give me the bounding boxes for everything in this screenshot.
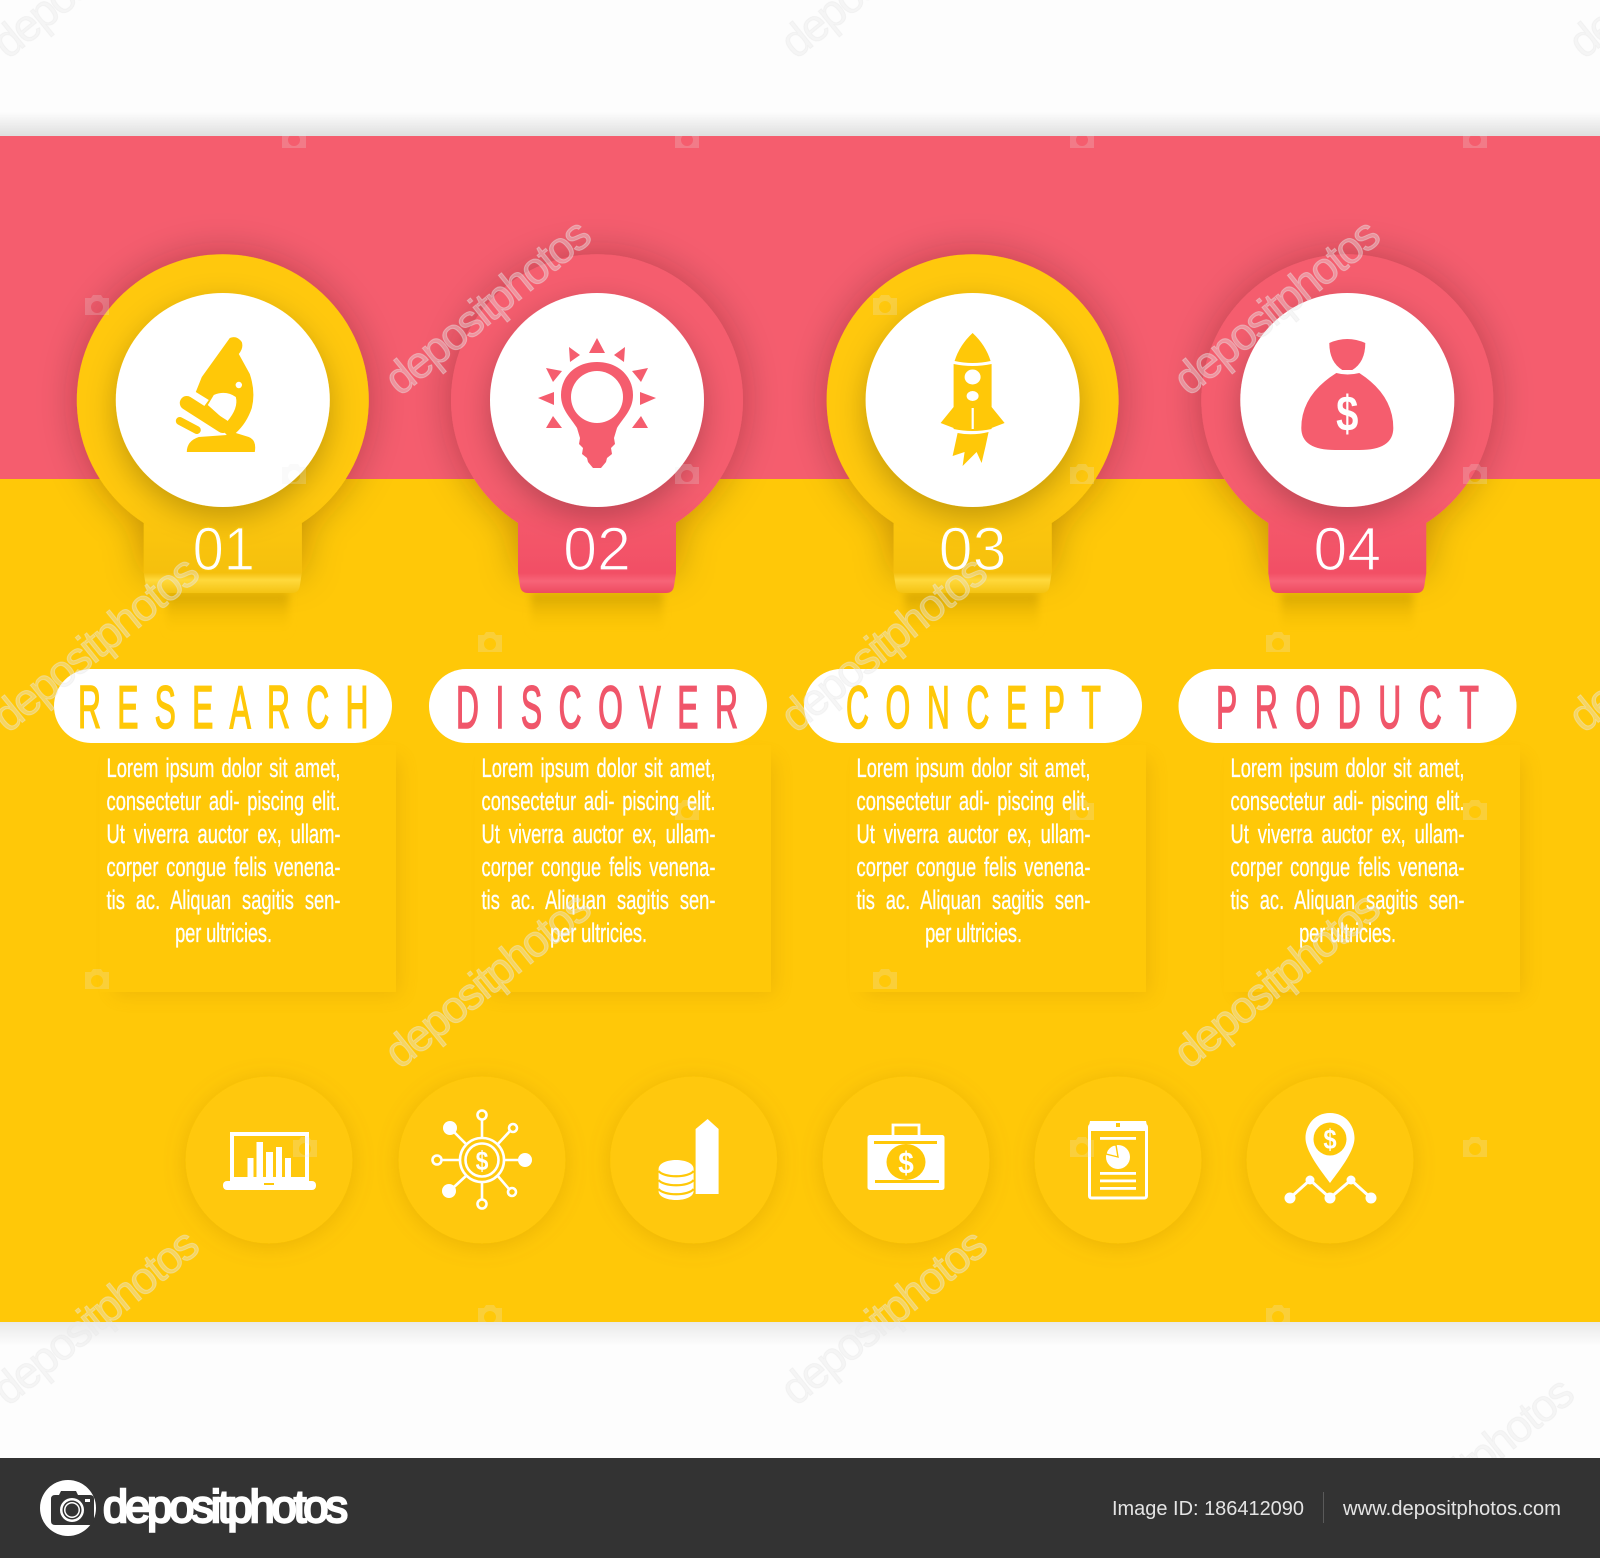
pin 03: concept [827, 254, 1119, 635]
image id: Image ID: 186412090 [1112, 1498, 1304, 1520]
text block: concept: corper congue felis venena- [856, 852, 1090, 882]
icon circle: money case [822, 1076, 990, 1244]
pin 04: product [1201, 254, 1493, 635]
icon circle: report document [1034, 1076, 1202, 1244]
icon: money bag [1301, 339, 1393, 450]
watermark: depositphotos [374, 881, 601, 1078]
text block: discover: Ut viverra auctor ex, ullam- [481, 819, 715, 849]
watermark: depositphotos [770, 545, 997, 742]
heading pill: product: PRODUCT [1216, 676, 1479, 742]
text block: product: tis ac. Aliquan sagitis sen- [1231, 885, 1464, 915]
pin 01: research [77, 254, 369, 635]
text block: concept: consectetur adi- piscing elit. [856, 786, 1090, 816]
watermark: depositphotos [1357, 1366, 1584, 1558]
text block: research: tis ac. Aliquan sagitis sen- [106, 885, 340, 915]
icon: light bulb [538, 338, 656, 468]
heading pill: discover: DISCOVER [456, 676, 738, 742]
text block: discover: tis ac. Aliquan sagitis sen- [481, 885, 715, 915]
text block: research: corper congue felis venena- [106, 852, 340, 882]
number 01: 01 [193, 516, 255, 584]
text block: concept [856, 753, 1090, 948]
pin 02: discover [451, 254, 743, 635]
text block: concept: Ut viverra auctor ex, ullam- [856, 819, 1090, 849]
icon: camera logo [40, 1480, 96, 1536]
icon circle: location pin chart: $ [1323, 1123, 1337, 1155]
watermark: depositphotos [1163, 208, 1390, 405]
heading pill: concept [804, 669, 1142, 743]
text block: product: consectetur adi- piscing elit. [1231, 786, 1464, 816]
number 02: 02 [563, 515, 631, 583]
text block: research: per ultricies. [175, 918, 271, 948]
text block: discover: per ultricies. [550, 918, 646, 948]
text block: concept: Lorem ipsum dolor sit amet, [856, 753, 1090, 783]
text block: discover: corper congue felis venena- [481, 852, 715, 882]
icon circle: laptop chart [186, 1076, 352, 1244]
text block: research [106, 753, 340, 948]
text block: product [1230, 753, 1464, 948]
text block: product: Ut viverra auctor ex, ullam- [1231, 819, 1464, 849]
watermark: depositphotos [1163, 881, 1390, 1078]
watermark: depositphotos [374, 208, 601, 405]
text block: research: Ut viverra auctor ex, ullam- [106, 819, 340, 849]
text block: discover [481, 753, 715, 948]
text card shadow: concept [850, 745, 1146, 992]
icon circle: dollar network: $ [476, 1146, 488, 1176]
text block: product: Lorem ipsum dolor sit amet, [1231, 753, 1464, 783]
text block: discover: consectetur adi- piscing elit. [481, 786, 715, 816]
icon: rocket [941, 333, 1005, 466]
text block: research: Lorem ipsum dolor sit amet, [106, 753, 340, 783]
number 03: 03 [939, 515, 1007, 583]
text block: concept: tis ac. Aliquan sagitis sen- [856, 885, 1090, 915]
heading pill: research: RESEARCH [78, 676, 368, 742]
watermark: depositphotos [770, 1218, 997, 1415]
text block: concept: per ultricies. [925, 918, 1021, 948]
text card shadow: research [100, 745, 396, 992]
text card shadow: product [1224, 745, 1520, 992]
heading pill: product [1178, 669, 1516, 743]
footer bar [0, 1458, 1600, 1558]
logo wordmark: depositphotos [103, 1481, 348, 1532]
icon circle: money case: $ [898, 1146, 914, 1180]
number 04: 04 [1313, 515, 1381, 583]
text card shadow: discover [475, 745, 771, 992]
website: www.depositphotos.com [1342, 1498, 1561, 1520]
icon: money bag: $ [1336, 386, 1358, 442]
icon circle: location pin chart [1246, 1076, 1414, 1244]
icon circle: dollar network [398, 1076, 566, 1244]
text block: research: consectetur adi- piscing elit. [106, 786, 340, 816]
text block: product: corper congue felis venena- [1231, 852, 1464, 882]
heading pill: concept: CONCEPT [846, 676, 1101, 742]
text block: discover: Lorem ipsum dolor sit amet, [481, 753, 715, 783]
icon circle: coins and bar [610, 1076, 777, 1244]
icon: microscope [180, 337, 255, 452]
text block: product: per ultricies. [1299, 918, 1396, 948]
